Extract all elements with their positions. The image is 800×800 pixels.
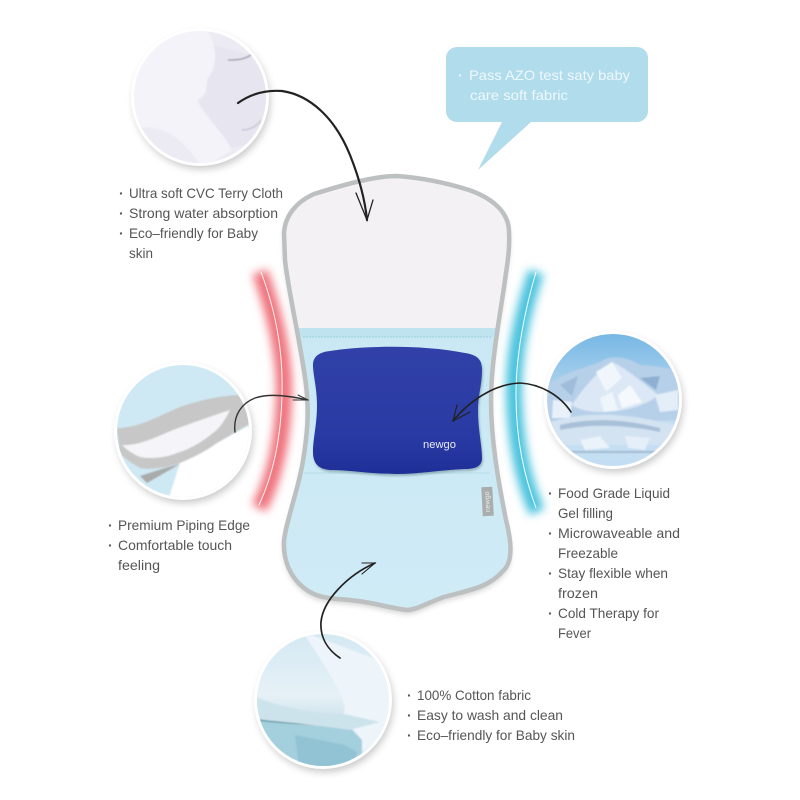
text: gel filling features: · [548, 485, 553, 501]
side tag: newgo [484, 491, 492, 512]
speech bubble text [458, 67, 630, 103]
arrow: terry cloth to towel panel [238, 91, 373, 220]
text: cotton fabric features: · [407, 687, 412, 703]
text: terry cloth features: Ultra soft CVC Terry Cloth [129, 185, 283, 201]
text: terry cloth features: · [119, 185, 124, 201]
product shadow [284, 180, 510, 614]
text: cotton fabric features [407, 687, 575, 743]
grey piping edge [284, 176, 510, 610]
arrow: ice to gel pack [453, 383, 571, 421]
text: gel filling features: · [548, 565, 553, 581]
text: cotton fabric features: Easy to wash and clean [417, 707, 563, 723]
text: terry cloth features: · [119, 225, 124, 241]
arrow: piping edge to product edge [235, 395, 308, 432]
text: cotton fabric features: · [407, 707, 412, 723]
terry cloth towel panel [286, 178, 507, 337]
inset circle: terry cloth [130, 28, 270, 170]
newgo logo: newgo [423, 439, 456, 451]
text: cotton fabric features: Eco–friendly for Baby skin [417, 727, 575, 743]
text: gel filling features: · [548, 525, 553, 541]
text: terry cloth features [119, 185, 283, 261]
gel pack shadow [314, 349, 483, 476]
speech bubble text: Pass AZO test saty baby [469, 67, 630, 83]
inset circle: cotton fabric [250, 630, 400, 775]
text: gel filling features: Microwaveable and [558, 525, 680, 541]
text: gel filling features: Freezable [558, 545, 618, 561]
text: gel filling features: Cold Therapy for [558, 605, 659, 621]
text: gel filling features: Gel filling [558, 505, 613, 521]
side tag [481, 487, 494, 516]
text: gel filling features: Stay flexible when [558, 565, 668, 581]
blue cold glow [514, 272, 537, 512]
red heat glow [259, 272, 284, 508]
text: terry cloth features: Strong water absorption [129, 205, 278, 221]
text: gel filling features: Food Grade Liquid [558, 485, 670, 501]
text: piping edge features: feeling [118, 557, 160, 573]
inset circle: piping edge [114, 365, 256, 506]
text: terry cloth features: skin [129, 245, 153, 261]
text: terry cloth features: · [119, 205, 124, 221]
pocket stitching [303, 336, 491, 338]
speech bubble text: · [458, 67, 463, 83]
product: baby gel pack holder [270, 170, 520, 614]
text: gel filling features [548, 485, 680, 641]
text: piping edge features: Comfortable touch [118, 537, 232, 553]
text: cotton fabric features: · [407, 727, 412, 743]
speech bubble [446, 47, 648, 170]
blue gel pack [313, 347, 482, 474]
text: piping edge features: · [108, 517, 113, 533]
text: gel filling features: Fever [558, 625, 591, 641]
text: piping edge features [108, 517, 250, 573]
cotton body [284, 176, 510, 610]
text: terry cloth features: Eco–friendly for Baby [129, 225, 258, 241]
text: gel filling features: · [548, 605, 553, 621]
text: piping edge features: · [108, 537, 113, 553]
text: gel filling features: frozen [558, 585, 598, 601]
inset circle: ice gel [544, 331, 685, 472]
text: cotton fabric features: 100% Cotton fabric [417, 687, 531, 703]
speech bubble text: care soft fabric [470, 87, 568, 103]
pocket edge [304, 472, 490, 474]
text: piping edge features: Premium Piping Edge [118, 517, 250, 533]
arrow: cotton fabric to body [321, 563, 375, 658]
